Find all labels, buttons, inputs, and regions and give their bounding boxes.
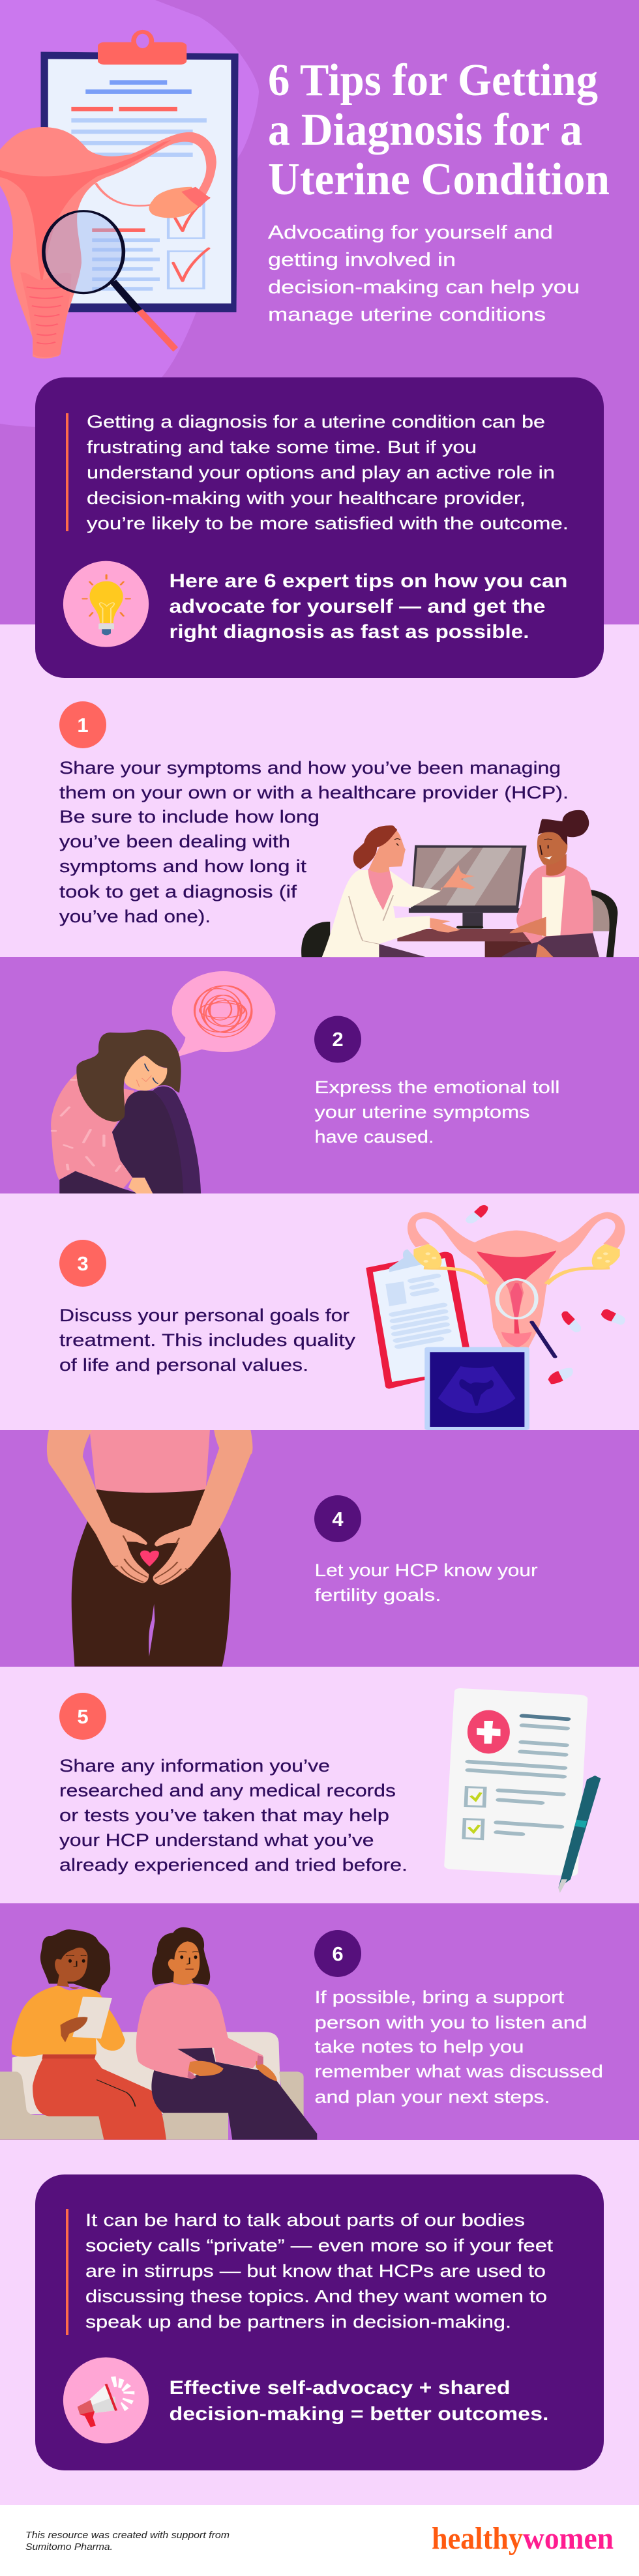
illustration: clipboard with uterus and magnifying glass [0, 30, 239, 359]
number badge 4: 4 [332, 1508, 344, 1530]
tip 2 text: have caused. [314, 1127, 434, 1147]
illustration: torso with hands forming heart [47, 1430, 252, 1667]
panel: tip 4 [47, 1430, 538, 1667]
pills [466, 1205, 625, 1384]
accent bar [66, 413, 68, 531]
logo: healthywomen: women [523, 2521, 614, 2556]
callout text: advocate for yourself — and get the [170, 596, 545, 617]
cervix [20, 272, 71, 357]
tip 6 text: remember what was discussed [314, 2062, 603, 2081]
footer credit [25, 2530, 230, 2553]
closing paragraph: are in stirrups — but know that HCPs are used to [85, 2261, 546, 2281]
callout text [170, 2377, 549, 2425]
intro paragraph [87, 412, 569, 533]
magnifier lens [44, 211, 123, 293]
tip 1 text: Share your symptoms and how you’ve been managing [59, 758, 561, 778]
tip 2 text: your uterine symptoms [314, 1102, 529, 1122]
tip 1 text: took to get a diagnosis (if [59, 882, 297, 901]
tip 2 text [314, 1077, 559, 1147]
accent bar [66, 2209, 68, 2335]
clipboard paper [48, 59, 231, 303]
callout text: Here are 6 expert tips on how you can [170, 570, 567, 592]
cervix ridges [27, 287, 63, 344]
tip 1 text: Be sure to include how long [59, 807, 320, 827]
panel: tip 5 [59, 1688, 601, 1893]
closing paragraph [85, 2210, 554, 2332]
tip 4 text: Let your HCP know your [314, 1560, 538, 1580]
title: a Diagnosis for a [268, 105, 582, 155]
number badge 1: 1 [77, 714, 89, 737]
intro paragraph: understand your options and play an active role in [87, 463, 555, 482]
ovary ligament [96, 183, 151, 206]
clipboard clip [98, 30, 186, 65]
illustration: medical form and pen [444, 1688, 601, 1893]
callout text: decision-making = better outcomes. [170, 2403, 549, 2425]
tip 6 text: person with you to listen and [314, 2013, 587, 2032]
subtitle: Advocating for yourself and [268, 222, 553, 243]
number badge 1 [59, 701, 106, 748]
illustration: uterus diagram, clipboard, ultrasound and pills [366, 1205, 625, 1430]
fimbriae [181, 187, 210, 207]
tip 5 text: or tests you’ve taken that may help [59, 1806, 389, 1825]
tip 1 text: them on your own or with a healthcare provider (HCP). [59, 783, 569, 802]
icon: megaphone [63, 2357, 149, 2443]
clipboard board [40, 52, 239, 312]
tip 3 text: treatment. This includes quality [59, 1330, 356, 1350]
tip 2 text: Express the emotional toll [314, 1077, 559, 1097]
closing paragraph: It can be hard to talk about parts of our bodies [85, 2210, 525, 2230]
magnifier handle [110, 280, 178, 351]
tip 5 text [59, 1756, 408, 1875]
checkboxes [168, 201, 203, 289]
panel: tip 1 [59, 701, 617, 957]
number badge 2: 2 [332, 1028, 344, 1051]
intro paragraph: Getting a diagnosis for a uterine condition can be [87, 412, 545, 432]
illustration: stressed woman with thought bubble [51, 971, 275, 1193]
panel: intro card [35, 377, 604, 678]
tip 6 text: and plan your next steps. [314, 2087, 550, 2107]
tip 5 text: researched and any medical records [59, 1781, 396, 1800]
tip 1 text: symptoms and how long it [59, 856, 307, 876]
subtitle [268, 222, 580, 325]
title: Uterine Condition [268, 154, 610, 205]
panel: closing card [35, 2174, 604, 2470]
tip 1 text [59, 758, 569, 926]
footer credit: This resource was created with support from [25, 2530, 230, 2541]
callout text: Effective self-advocacy + shared [170, 2377, 510, 2399]
tip 3 text: Discuss your personal goals for [59, 1306, 349, 1325]
intro paragraph: you’re likely to be more satisfied with the outcome. [87, 514, 569, 533]
logo: healthywomen: healthy [432, 2521, 523, 2556]
tip 4 text: fertility goals. [314, 1585, 441, 1605]
number badge 2 [314, 1016, 361, 1062]
number badge 6: 6 [332, 1942, 344, 1965]
tip 4 text [314, 1560, 538, 1605]
illustration: two women on a sofa [0, 1927, 317, 2140]
panel: tip 3 [59, 1205, 625, 1430]
panel: tip 6 [0, 1927, 603, 2140]
intro paragraph: frustrating and take some time. But if you [87, 437, 477, 457]
title [268, 55, 610, 205]
tip 6 text: take notes to help you [314, 2037, 524, 2056]
title: 6 Tips for Getting [268, 55, 598, 106]
closing paragraph: discussing these topics. And they want women to [85, 2287, 547, 2306]
tip 6 text: If possible, bring a support [314, 1987, 565, 2007]
closing paragraph: speak up and be partners in decision-making. [85, 2312, 511, 2332]
number badge 4 [314, 1495, 361, 1542]
tip 1 text: you’ve been dealing with [59, 832, 290, 851]
subtitle: getting involved in [268, 250, 456, 271]
tip 5 text: already experienced and tried before. [59, 1855, 408, 1875]
subtitle: decision-making can help you [268, 277, 580, 298]
tip 3 text [59, 1306, 356, 1375]
ovary [149, 187, 200, 218]
callout text: right diagnosis as fast as possible. [170, 621, 529, 643]
number badge 6 [314, 1930, 361, 1977]
icon: light bulb [63, 561, 149, 647]
intro paragraph: decision-making with your healthcare provider, [87, 488, 526, 508]
tip 1 text: you’ve had one). [59, 907, 211, 926]
number badge 5: 5 [77, 1705, 89, 1728]
subtitle: manage uterine conditions [268, 304, 546, 325]
illustration: doctor and patient at desk [301, 810, 617, 957]
check marks [173, 198, 209, 281]
number badge 3: 3 [77, 1252, 89, 1275]
number badge 3 [59, 1240, 106, 1287]
closing paragraph: society calls “private” — even more so if your feet [85, 2236, 554, 2255]
footer credit: Sumitomo Pharma. [25, 2541, 113, 2553]
uterus inner cavity [0, 140, 171, 280]
tip 6 text [314, 1987, 603, 2107]
tip 3 text: of life and personal values. [59, 1355, 308, 1375]
panel: tip 2 [51, 971, 559, 1193]
document lines [71, 80, 207, 291]
uterus body [0, 127, 216, 359]
number badge 5 [59, 1693, 106, 1740]
callout text [170, 570, 567, 643]
tip 5 text: your HCP understand what you’ve [59, 1830, 374, 1850]
logo: healthywomen [432, 2521, 614, 2556]
tip 5 text: Share any information you’ve [59, 1756, 330, 1776]
